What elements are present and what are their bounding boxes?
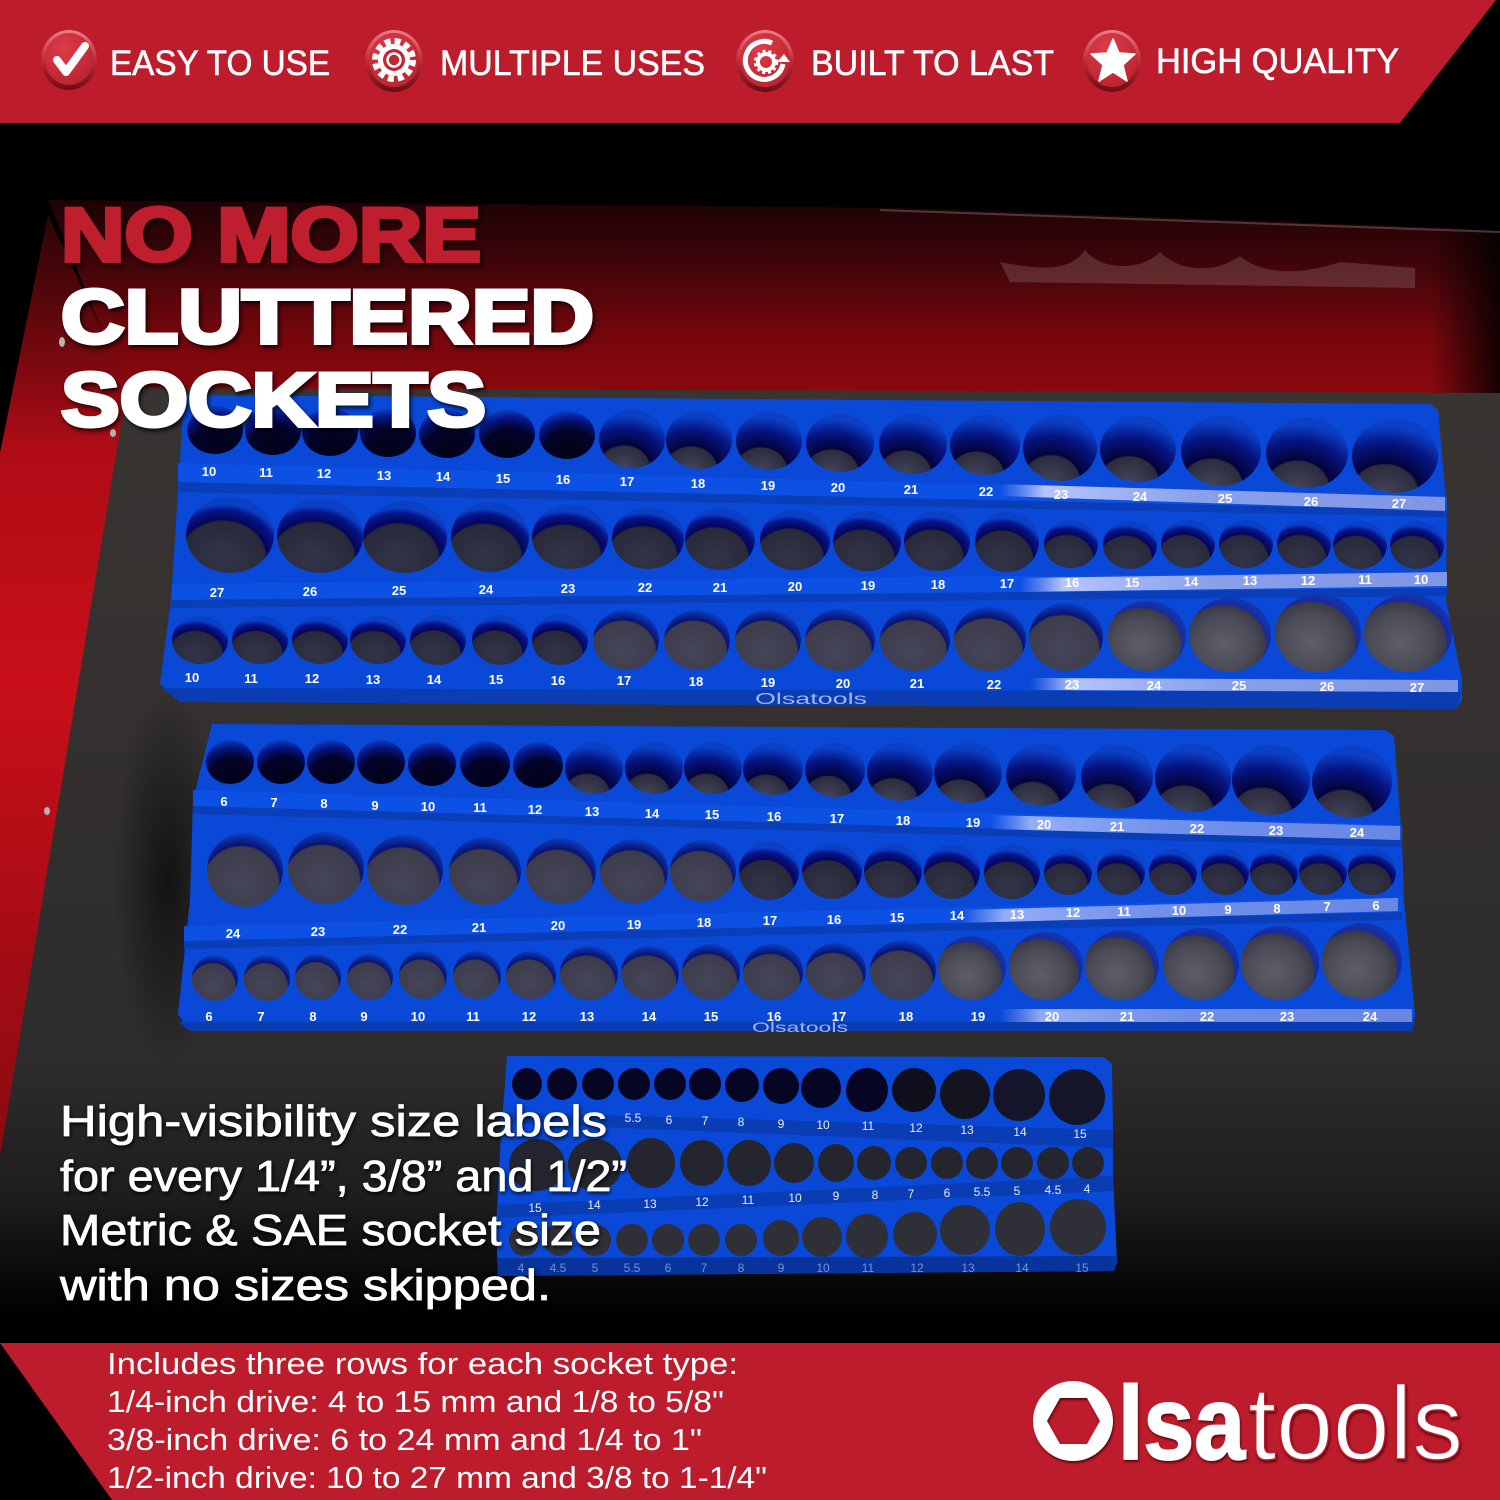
benefit: multiple uses (365, 30, 705, 92)
size labels row 3: 14 (642, 1009, 657, 1024)
size labels row 2: 15 (1125, 575, 1139, 590)
holes row 1 (187, 406, 1438, 493)
size labels row 2: 10 (788, 1191, 802, 1205)
text block: included socket types (107, 1346, 767, 1495)
size labels row 2: 11 (742, 1193, 755, 1207)
holes row 3 (172, 594, 1452, 672)
row separators (193, 806, 1402, 847)
size labels row 2: 25 (392, 583, 406, 598)
size labels row 2: 5.5 (974, 1185, 991, 1199)
label strips (193, 790, 1402, 840)
tray brand mark: Olsatools (752, 1019, 848, 1035)
size labels row 1: 24 (1350, 825, 1365, 840)
size labels row 2: 15 (890, 910, 904, 925)
size labels row 3: 5 (592, 1261, 599, 1275)
size labels row 2: 14 (950, 908, 965, 923)
size labels row 3 (185, 670, 1424, 695)
size labels row 1: 7 (270, 795, 278, 810)
size labels row 3: 9 (778, 1261, 785, 1275)
benefit: easy to use (41, 30, 330, 90)
panel: small socket tray (496, 1056, 1117, 1276)
size labels row 2: 11 (1358, 572, 1372, 587)
size labels row 1: 11 (473, 800, 487, 815)
background: red drawer back panel (48, 200, 1500, 395)
size labels row 3: 25 (1232, 678, 1246, 693)
size labels row 3: 13 (580, 1009, 594, 1024)
title line: no more: NO MORE (61, 193, 481, 278)
size labels row 2: 21 (472, 920, 486, 935)
size labels row 2: 16 (827, 912, 841, 927)
label strips (178, 463, 1447, 510)
size labels row 2: 24 (479, 582, 494, 597)
size labels row 1: 17 (830, 811, 844, 826)
title line: cluttered: CLUTTERED (61, 275, 594, 360)
size labels row 2 (528, 1182, 1091, 1215)
size labels row 3: 16 (551, 673, 565, 688)
size labels row 1: 7 (702, 1114, 709, 1128)
size labels row 3: 4.5 (550, 1261, 567, 1275)
size labels row 3: 19 (761, 675, 775, 690)
size labels row 2: 24 (226, 926, 241, 941)
size labels row 1: 5.5 (625, 1111, 642, 1125)
label: BUILT TO LAST (811, 44, 1054, 83)
size labels row 3: 20 (836, 676, 850, 691)
size labels row 1: 20 (1037, 817, 1051, 832)
panel: medium socket tray (178, 724, 1415, 1035)
size labels row 1: 27 (1392, 496, 1406, 511)
size labels row 2: 21 (713, 580, 727, 595)
size labels row 3: 22 (1200, 1009, 1214, 1024)
text block: high-visibility labels: High-visibility size labels (60, 1097, 607, 1146)
size labels row 3: 19 (971, 1009, 985, 1024)
size labels row 3: 10 (185, 670, 199, 685)
size labels row 1: 16 (767, 809, 781, 824)
size labels row 1: 22 (979, 484, 993, 499)
size labels row 2: 23 (311, 924, 325, 939)
size labels row 3: 17 (617, 673, 631, 688)
size labels row 1: 13 (585, 804, 599, 819)
icon: check mark badge (41, 30, 97, 90)
icon: refresh gear badge (736, 30, 794, 92)
size labels row 2: 23 (561, 581, 575, 596)
size labels row 1: 23 (1054, 487, 1068, 502)
size labels row 3 (518, 1261, 1089, 1275)
size labels row 3: 23 (1065, 677, 1079, 692)
size labels row 1: 25 (1218, 491, 1232, 506)
holes row 3 (509, 1199, 1106, 1258)
logo word: lsa: lsa (1118, 1366, 1246, 1482)
size labels row 2: 19 (627, 917, 641, 932)
size labels row 2: 4 (1084, 1182, 1091, 1196)
benefit: high quality (1083, 30, 1399, 92)
size labels row 3: 20 (1045, 1009, 1059, 1024)
size labels row 1: 13 (960, 1123, 974, 1137)
size labels row 3: 8 (309, 1009, 317, 1024)
tray body (496, 1056, 1117, 1276)
size labels row 3: 9 (360, 1009, 368, 1024)
size labels row 1: 22 (1190, 821, 1204, 836)
size labels row 1: 18 (896, 813, 910, 828)
size labels row 2: 10 (1414, 572, 1428, 587)
size labels row 1: 12 (528, 802, 542, 817)
size labels row 1: 23 (1269, 823, 1283, 838)
holes row 2 (207, 832, 1396, 907)
top banner (0, 0, 1496, 123)
size labels row 1 (202, 464, 1406, 511)
size labels row 2: 17 (763, 913, 777, 928)
background: dark foam mat (0, 388, 1500, 1343)
size labels row 3: 7 (701, 1261, 708, 1275)
icon: star badge (1083, 30, 1141, 92)
background: dark right corner of drawer (1430, 228, 1500, 395)
size labels row 2: 5 (1014, 1184, 1021, 1198)
size labels row 1: 14 (1013, 1125, 1027, 1139)
size labels row 2: 14 (1184, 574, 1199, 589)
size labels row 3: 13 (366, 672, 380, 687)
size labels row 1: 15 (705, 807, 719, 822)
size labels row 1: 15 (1073, 1127, 1087, 1141)
size labels row 2: 9 (833, 1189, 840, 1203)
size labels row 3: 14 (427, 672, 442, 687)
size labels row 1: 9 (371, 798, 379, 813)
tray bottom skirt (178, 1022, 1415, 1031)
size labels row 1: 16 (556, 472, 570, 487)
size labels row 1: 6 (220, 794, 228, 809)
size labels row 1: 9 (778, 1117, 785, 1131)
size labels row 1: 17 (620, 474, 634, 489)
size labels row 3: 11 (862, 1261, 875, 1275)
size labels row 3: 24 (1147, 678, 1162, 693)
size labels row 3: 6 (205, 1009, 213, 1024)
size labels row 3: 18 (899, 1009, 913, 1024)
text block: high-visibility labels: with no sizes skipped. (59, 1261, 551, 1310)
label: EASY TO USE (110, 44, 330, 83)
size labels row 1: 21 (904, 482, 918, 497)
size labels row 2: 12 (1066, 905, 1080, 920)
icon: gear badge (365, 30, 423, 92)
size labels row 1: 13 (377, 468, 391, 483)
holes row 1 (206, 740, 1392, 818)
highlight strips (1000, 484, 1445, 511)
size labels row 3: 24 (1363, 1009, 1378, 1024)
title (61, 193, 594, 443)
size labels row 2: 19 (861, 578, 875, 593)
size labels row 2: 8 (1273, 901, 1281, 916)
size labels row 3: 15 (489, 672, 503, 687)
size labels row 2: 22 (638, 580, 652, 595)
background: faint reflection on drawer wall (1000, 250, 1415, 288)
size labels row 2: 6 (944, 1186, 951, 1200)
size labels row 3: 13 (961, 1261, 975, 1275)
size labels row 1: 19 (761, 478, 775, 493)
size labels row 2 (226, 898, 1380, 941)
size labels row 3: 11 (466, 1009, 480, 1024)
bottom banner (0, 1343, 1500, 1500)
label strips (500, 1112, 1113, 1148)
size labels row 2: 12 (1301, 573, 1315, 588)
size labels row 1: 10 (202, 464, 216, 479)
size labels row 3: 16 (767, 1009, 781, 1024)
size labels row 2: 20 (551, 918, 565, 933)
text block: included socket types: 3/8-inch drive: 6 to 24 mm and 1/4 to 1" (107, 1422, 702, 1457)
icon: rail bolts (44, 337, 116, 815)
background: red drawer side rail (0, 215, 130, 1156)
size labels row 1: 10 (421, 799, 435, 814)
size labels row 3: 10 (411, 1009, 425, 1024)
size labels row 3: 17 (832, 1009, 846, 1024)
size labels row 2: 14 (587, 1198, 601, 1212)
size labels row 3: 8 (738, 1261, 745, 1275)
size labels row 1: 11 (862, 1119, 875, 1133)
label: HIGH QUALITY (1156, 42, 1399, 81)
text block: high-visibility labels: Metric & SAE socket size (60, 1206, 601, 1255)
benefit: built to last (736, 30, 1054, 92)
size labels row 2: 13 (1243, 573, 1257, 588)
size labels row 2: 9 (1224, 902, 1232, 917)
size labels row 2: 10 (1172, 903, 1186, 918)
size labels row 2: 18 (697, 915, 711, 930)
panel: large socket tray (160, 395, 1462, 709)
size labels row 1: 14 (645, 806, 660, 821)
size labels row 1: 26 (1304, 494, 1318, 509)
size labels row 2: 15 (528, 1201, 542, 1215)
holes row 2 (509, 1138, 1104, 1191)
size labels row 1 (220, 794, 1365, 840)
size labels row 3 (205, 1009, 1378, 1024)
size labels row 1: 6 (666, 1113, 673, 1127)
size labels row 1: 18 (691, 476, 705, 491)
size labels row 2: 26 (303, 584, 317, 599)
size labels row 2: 20 (788, 579, 802, 594)
label: MULTIPLE USES (440, 44, 705, 83)
size labels row 3: 21 (1120, 1009, 1134, 1024)
size labels row 3: 11 (244, 671, 258, 686)
size labels row 1: 11 (259, 465, 273, 480)
logo: Olsatools (1033, 1366, 1463, 1482)
size labels row 3: 26 (1320, 679, 1334, 694)
text block: included socket types: 1/4-inch drive: 4 to 15 mm and 1/8 to 5/8" (107, 1384, 724, 1419)
size labels row 2: 7 (1323, 899, 1331, 914)
size labels row 1: 21 (1110, 819, 1124, 834)
size labels row 3: 14 (1015, 1261, 1029, 1275)
size labels row 2: 18 (931, 577, 945, 592)
tray bottom skirt (162, 688, 1462, 709)
size labels row 3: 12 (910, 1261, 924, 1275)
size labels row 1: 12 (317, 466, 331, 481)
logo mark: hexagon O (1033, 1381, 1113, 1461)
size labels row 2: 7 (908, 1187, 915, 1201)
size labels row 3: 15 (1075, 1261, 1089, 1275)
size labels row 3: 12 (305, 671, 319, 686)
tray body (160, 395, 1462, 709)
size labels row 3: 4 (518, 1261, 525, 1275)
size labels row 3: 27 (1410, 680, 1424, 695)
size labels row 2: 4.5 (1045, 1183, 1062, 1197)
size labels row 1: 8 (320, 796, 328, 811)
size labels row 2: 27 (210, 585, 224, 600)
row separators (178, 482, 1447, 517)
size labels row 3: 10 (816, 1261, 830, 1275)
size labels row 2: 8 (872, 1188, 879, 1202)
background: drawer top edge line (880, 210, 1500, 232)
size labels row 1 (625, 1111, 1087, 1141)
tray body (178, 724, 1415, 1031)
size labels row 1: 12 (909, 1121, 923, 1135)
text block: high-visibility labels (59, 1097, 627, 1310)
size labels row 1: 24 (1133, 489, 1148, 504)
size labels row 3: 6 (665, 1261, 672, 1275)
holes row 2 (186, 497, 1444, 573)
text block: included socket types: 1/2-inch drive: 10 to 27 mm and 3/8 to 1-1/4" (107, 1460, 767, 1495)
holes row 1 (512, 1068, 1105, 1125)
size labels row 3: 23 (1280, 1009, 1294, 1024)
size labels row 3: 22 (987, 677, 1001, 692)
tray bottom skirt (497, 1256, 1117, 1276)
size labels row 2 (210, 572, 1428, 600)
size labels row 1: 8 (738, 1115, 745, 1129)
text block: included socket types: Includes three rows for each socket type: (107, 1346, 738, 1381)
size labels row 1: 14 (436, 469, 451, 484)
size labels row 2: 22 (393, 922, 407, 937)
size labels row 1: 20 (831, 480, 845, 495)
title line: sockets: SOCKETS (61, 358, 486, 443)
background: mat shadow patch (113, 690, 223, 1070)
size labels row 2: 13 (643, 1197, 657, 1211)
size labels row 3: 5.5 (624, 1261, 641, 1275)
size labels row 3: 21 (910, 676, 924, 691)
size labels row 3: 12 (522, 1009, 536, 1024)
size labels row 2: 6 (1372, 898, 1380, 913)
size labels row 1: 19 (966, 815, 980, 830)
size labels row 1: 10 (816, 1118, 830, 1132)
logo word: tools: tools (1248, 1366, 1463, 1482)
size labels row 3: 15 (704, 1009, 718, 1024)
size labels row 2: 17 (1000, 576, 1014, 591)
highlight strips (990, 815, 1400, 840)
size labels row 2: 12 (695, 1195, 709, 1209)
tray brand mark: Olsatools (755, 691, 867, 708)
size labels row 3: 18 (689, 674, 703, 689)
size labels row 2: 13 (1010, 907, 1024, 922)
size labels row 2: 11 (1117, 904, 1131, 919)
size labels row 2: 16 (1065, 575, 1079, 590)
size labels row 1: 15 (496, 471, 510, 486)
text block: high-visibility labels: for every 1/4”, 3/8” and 1/2” (60, 1152, 627, 1201)
size labels row 3: 7 (257, 1009, 265, 1024)
holes row 3 (192, 923, 1402, 1001)
